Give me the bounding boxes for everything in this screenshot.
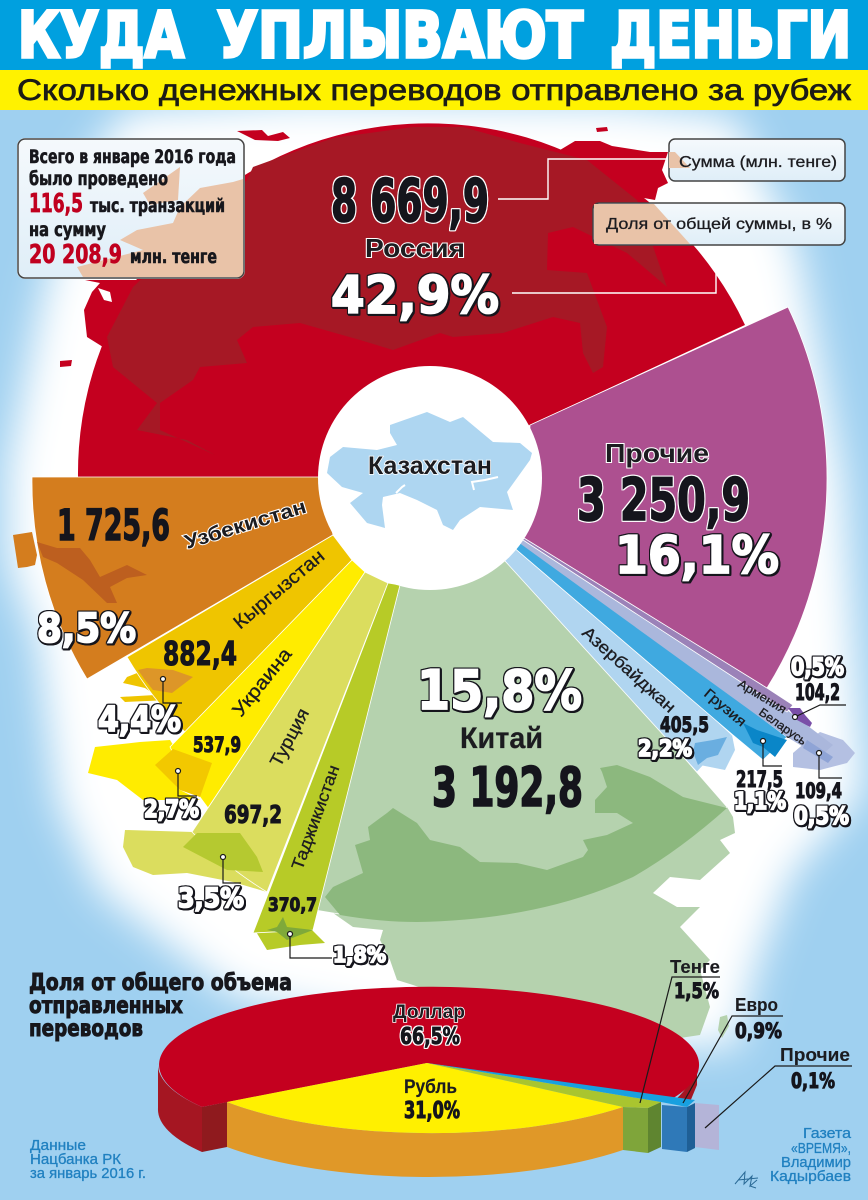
pie callout: other — [705, 1045, 852, 1128]
panel: Uzbekistan sector — [13, 477, 333, 679]
panel: China sector — [315, 558, 735, 1050]
pie slice: euro — [427, 1063, 695, 1152]
data: other countries: Прочие — [605, 438, 709, 468]
map: Kazakhstan — [327, 412, 532, 530]
source note — [30, 1137, 146, 1182]
panel: Kazakhstan centre — [318, 366, 542, 590]
pie slice: dollar — [158, 987, 699, 1152]
data: Georgia — [701, 685, 786, 815]
map: Uzbekistan — [37, 542, 147, 603]
pie labels: 66,5% — [400, 1024, 460, 1050]
map: Kyrgyzstan — [138, 668, 193, 693]
data: Belarus — [756, 705, 849, 830]
pie callout: other: Прочие — [780, 1045, 850, 1065]
data: Tajikistan: 1,8% — [333, 943, 386, 967]
data: China: Китай — [460, 722, 543, 755]
credit note: «ВРЕМЯ», — [791, 1140, 851, 1157]
data: Turkey: 3,5% — [178, 883, 244, 914]
title: КУДА — [18, 0, 184, 72]
data: Uzbekistan — [37, 496, 309, 652]
pie callout: euro: 0,9% — [735, 1019, 782, 1043]
panel: Turkey sector — [123, 572, 388, 892]
heading: currency share: отправленных — [29, 993, 184, 1019]
legend: amount — [669, 139, 845, 181]
data: Armenia: 0,5% — [791, 653, 844, 681]
data: Georgia: 217,5 — [736, 768, 783, 793]
data: Tajikistan — [268, 763, 386, 967]
data: other countries — [577, 438, 779, 586]
data: Turkey: Турция — [266, 705, 313, 770]
panel: Ukraine sector — [88, 560, 365, 808]
panel: Kyrgyzstan sector — [120, 535, 352, 732]
pie labels: 31,0% — [404, 1098, 460, 1124]
pie callout: euro — [683, 995, 783, 1103]
pie callout: other: 0,1% — [791, 1069, 835, 1093]
panel: Russia sector — [60, 123, 745, 477]
map: Ukraine — [155, 749, 212, 797]
source note: Данные — [30, 1137, 86, 1154]
pie callout: tenge — [640, 957, 720, 1103]
data: Turkey: 697,2 — [224, 800, 282, 829]
callout: totals — [18, 139, 244, 278]
data: Georgia: Грузия — [701, 685, 750, 729]
credit note: Владимир — [781, 1154, 851, 1171]
data: Belarus: 0,5% — [794, 802, 849, 830]
title — [0, 0, 868, 72]
source note: за январь 2016 г. — [30, 1165, 146, 1182]
data: Armenia: Армения — [735, 677, 789, 716]
data: other countries: 16,1% — [615, 526, 779, 586]
pie labels: Рубль — [404, 1077, 457, 1098]
panel: other countries sector — [524, 307, 827, 688]
panel: Georgia sector — [505, 534, 787, 760]
panel: Azerbaijan sector — [495, 540, 735, 772]
map: Belarus — [803, 740, 833, 763]
data: Ukraine: 2,7% — [144, 795, 199, 823]
label: Kazakhstan: Казахстан — [368, 452, 492, 480]
data: Kyrgyzstan: 4,4% — [98, 700, 181, 740]
data: Russia: Россия — [365, 233, 465, 263]
heading: currency share: переводов — [29, 1016, 143, 1042]
data: Kyrgyzstan: Кыргызстан — [230, 546, 329, 634]
data: Ukraine — [144, 644, 297, 823]
data: Armenia: 104,2 — [795, 681, 840, 706]
data: Belarus: 109,4 — [795, 779, 842, 803]
data: Ukraine: Украина — [229, 644, 297, 721]
panel: Belarus sector — [518, 535, 855, 770]
data: Azerbaijan: 2,2% — [638, 737, 692, 762]
pie slice: other — [695, 1103, 719, 1150]
legend: share — [593, 203, 845, 245]
data: Tajikistan: Таджикистан — [288, 763, 343, 872]
data: Georgia: 1,1% — [734, 789, 786, 815]
data: China — [417, 659, 583, 819]
map: Tajikistan — [267, 917, 313, 940]
pie labels: Доллар — [393, 1002, 465, 1023]
credit note — [770, 1125, 852, 1185]
source note: Нацбанка РК — [30, 1151, 121, 1168]
heading: currency share — [29, 970, 292, 1042]
credit note: Газета — [803, 1125, 852, 1142]
callout: totals: на сумму — [29, 219, 106, 241]
data: Azerbaijan: Азербайджан — [578, 623, 679, 717]
data: China: 3 192,8 — [432, 756, 583, 819]
map: China — [325, 765, 727, 922]
data: Azerbaijan — [578, 623, 709, 762]
panel: Tajikistan sector — [253, 583, 400, 950]
data: Kyrgyzstan: 882,4 — [163, 634, 237, 673]
data: Kyrgyzstan — [98, 546, 329, 740]
pie slice: tenge — [427, 1063, 661, 1153]
callout: totals: 20 208,9 — [29, 240, 122, 270]
legend: amount: Сумма (млн. тенге) — [679, 154, 837, 171]
legend: share: Доля от общей суммы, в % — [606, 216, 832, 233]
subtitle: Сколько денежных переводов отправлено за рубеж — [17, 74, 851, 107]
data: Azerbaijan: 405,5 — [660, 713, 709, 737]
data: Turkey — [178, 705, 313, 914]
panel: Armenia sector — [520, 536, 812, 727]
data: Ukraine: 537,9 — [193, 733, 241, 757]
data: Russia: 42,9% — [331, 266, 499, 326]
pie labels — [393, 1002, 465, 1124]
data: Tajikistan: 370,7 — [268, 894, 317, 916]
callout: totals: было проведено — [29, 168, 168, 190]
callout: totals: Всего в январе 2016 года — [29, 146, 236, 168]
credit note: Кадырбаев — [770, 1168, 851, 1185]
map: Turkey — [183, 833, 263, 872]
data: Armenia — [735, 653, 846, 720]
data: Uzbekistan: Узбекистан — [182, 496, 309, 554]
data: Russia — [331, 166, 499, 326]
data: Uzbekistan: 8,5% — [37, 606, 136, 652]
pie callout: tenge: Тенге — [670, 957, 720, 977]
callout: totals: тыс. транзакций — [90, 195, 225, 217]
title: УПЛЫВАЮТ — [217, 0, 583, 72]
data: Uzbekistan: 1 725,6 — [57, 501, 170, 551]
data: Belarus: Беларусь — [756, 705, 809, 748]
data: other countries: 3 250,9 — [577, 465, 750, 534]
icon: signature — [735, 1172, 758, 1188]
leader lines: Russia — [498, 159, 716, 293]
subtitle — [0, 70, 868, 110]
callout: totals: млн. тенге — [130, 246, 217, 268]
chart: currency pie — [158, 987, 719, 1177]
map: Georgia — [743, 723, 787, 757]
pie slice: ruble — [227, 1063, 623, 1177]
map: Azerbaijan — [693, 737, 727, 765]
data: Russia: 8 669,9 — [331, 166, 489, 235]
pie callout: tenge: 1,5% — [674, 979, 719, 1003]
data: China: 15,8% — [417, 659, 582, 722]
pie callout: euro: Евро — [735, 995, 778, 1015]
callout: totals: 116,5 — [29, 189, 83, 219]
map: Armenia — [788, 708, 812, 727]
heading: currency share: Доля от общего объема — [29, 970, 292, 996]
